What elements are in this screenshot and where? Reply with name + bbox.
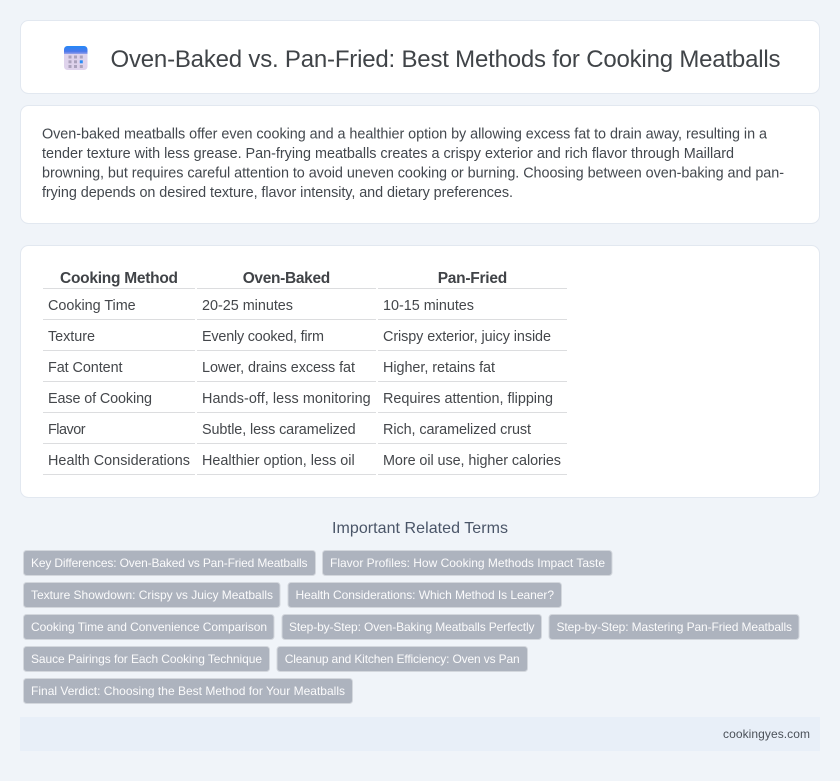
panel: title header [20,20,820,94]
tag [282,614,542,640]
intro paragraph: browning, but requires careful attention to avoid uneven cooking or burning. Choosing between oven-baking and pan- [42,166,784,182]
tag [24,646,270,672]
tag: Step-by-Step: Mastering Pan-Fried Meatballs [556,620,792,634]
tag [24,614,274,640]
tag [24,582,280,608]
intro paragraph [42,126,784,201]
table header row: Pan-Fried [438,270,507,287]
tag: Flavor Profiles: How Cooking Methods Impact Taste [330,556,605,570]
row: texture: Texture [48,329,95,345]
tag: Key Differences: Oven-Baked vs Pan-Fried Meatballs [31,556,308,570]
panel: comparison table [20,246,820,498]
tag [24,678,352,704]
row: cooking time: Cooking Time [48,298,136,314]
title: Oven-Baked vs. Pan-Fried: Best Methods for Cooking Meatballs [110,46,780,73]
table header row [43,270,567,289]
row: flavor: Flavor [48,422,86,438]
tag: Final Verdict: Choosing the Best Method for Your Meatballs [31,684,345,698]
row: flavor: Subtle, less caramelized [202,422,356,438]
intro paragraph: Oven-baked meatballs offer even cooking and a healthier option by allowing excess fat to drain away, resulting in a [42,126,767,142]
table header row: Oven-Baked [243,270,330,287]
tag [549,614,799,640]
footer bar [20,717,820,751]
row: fat content: Fat Content [48,360,122,376]
row: ease of cooking: Requires attention, flipping [383,391,553,407]
tag: Texture Showdown: Crispy vs Juicy Meatballs [31,588,273,602]
tag: Cleanup and Kitchen Efficiency: Oven vs Pan [285,652,520,666]
row: cooking time: 10-15 minutes [383,298,474,314]
tag [288,582,562,608]
tag: Health Considerations: Which Method Is Leaner? [296,588,554,602]
icon: calendar [64,46,88,70]
row: cooking time [43,298,567,320]
row: cooking time: 20-25 minutes [202,298,293,314]
intro paragraph: frying depends on desired texture, flavor intensity, and dietary preferences. [42,185,513,201]
tag: Cooking Time and Convenience Comparison [31,620,267,634]
tag [24,550,316,576]
footer bar: cookingyes.com [723,727,810,741]
row: health considerations [43,453,567,475]
row: flavor [43,422,567,444]
row: fat content: Lower, drains excess fat [202,360,355,376]
row: fat content [43,360,567,382]
row: health considerations: Health Considerations [48,453,190,469]
related term tags [24,550,799,704]
row: texture: Evenly cooked, firm [202,329,324,345]
tag [322,550,612,576]
tag [277,646,528,672]
row: fat content: Higher, retains fat [383,360,495,376]
table header row: Cooking Method [60,270,178,287]
tag: Step-by-Step: Oven-Baking Meatballs Perfectly [289,620,534,634]
row: health considerations: Healthier option, less oil [202,453,355,469]
panel: introduction [20,106,820,224]
row: texture: Crispy exterior, juicy inside [383,329,551,345]
row: ease of cooking [43,391,567,413]
row: health considerations: More oil use, higher calories [383,453,561,469]
row: ease of cooking: Ease of Cooking [48,391,152,407]
row: ease of cooking: Hands-off, less monitoring [202,391,371,407]
heading: important related terms: Important Related Terms [332,520,508,537]
intro paragraph: tender texture with less grease. Pan-frying meatballs creates a crispy exterior and rich flavor through Maillard [42,146,734,162]
row: texture [43,329,567,351]
tag: Sauce Pairings for Each Cooking Technique [31,652,262,666]
row: flavor: Rich, caramelized crust [383,422,531,438]
